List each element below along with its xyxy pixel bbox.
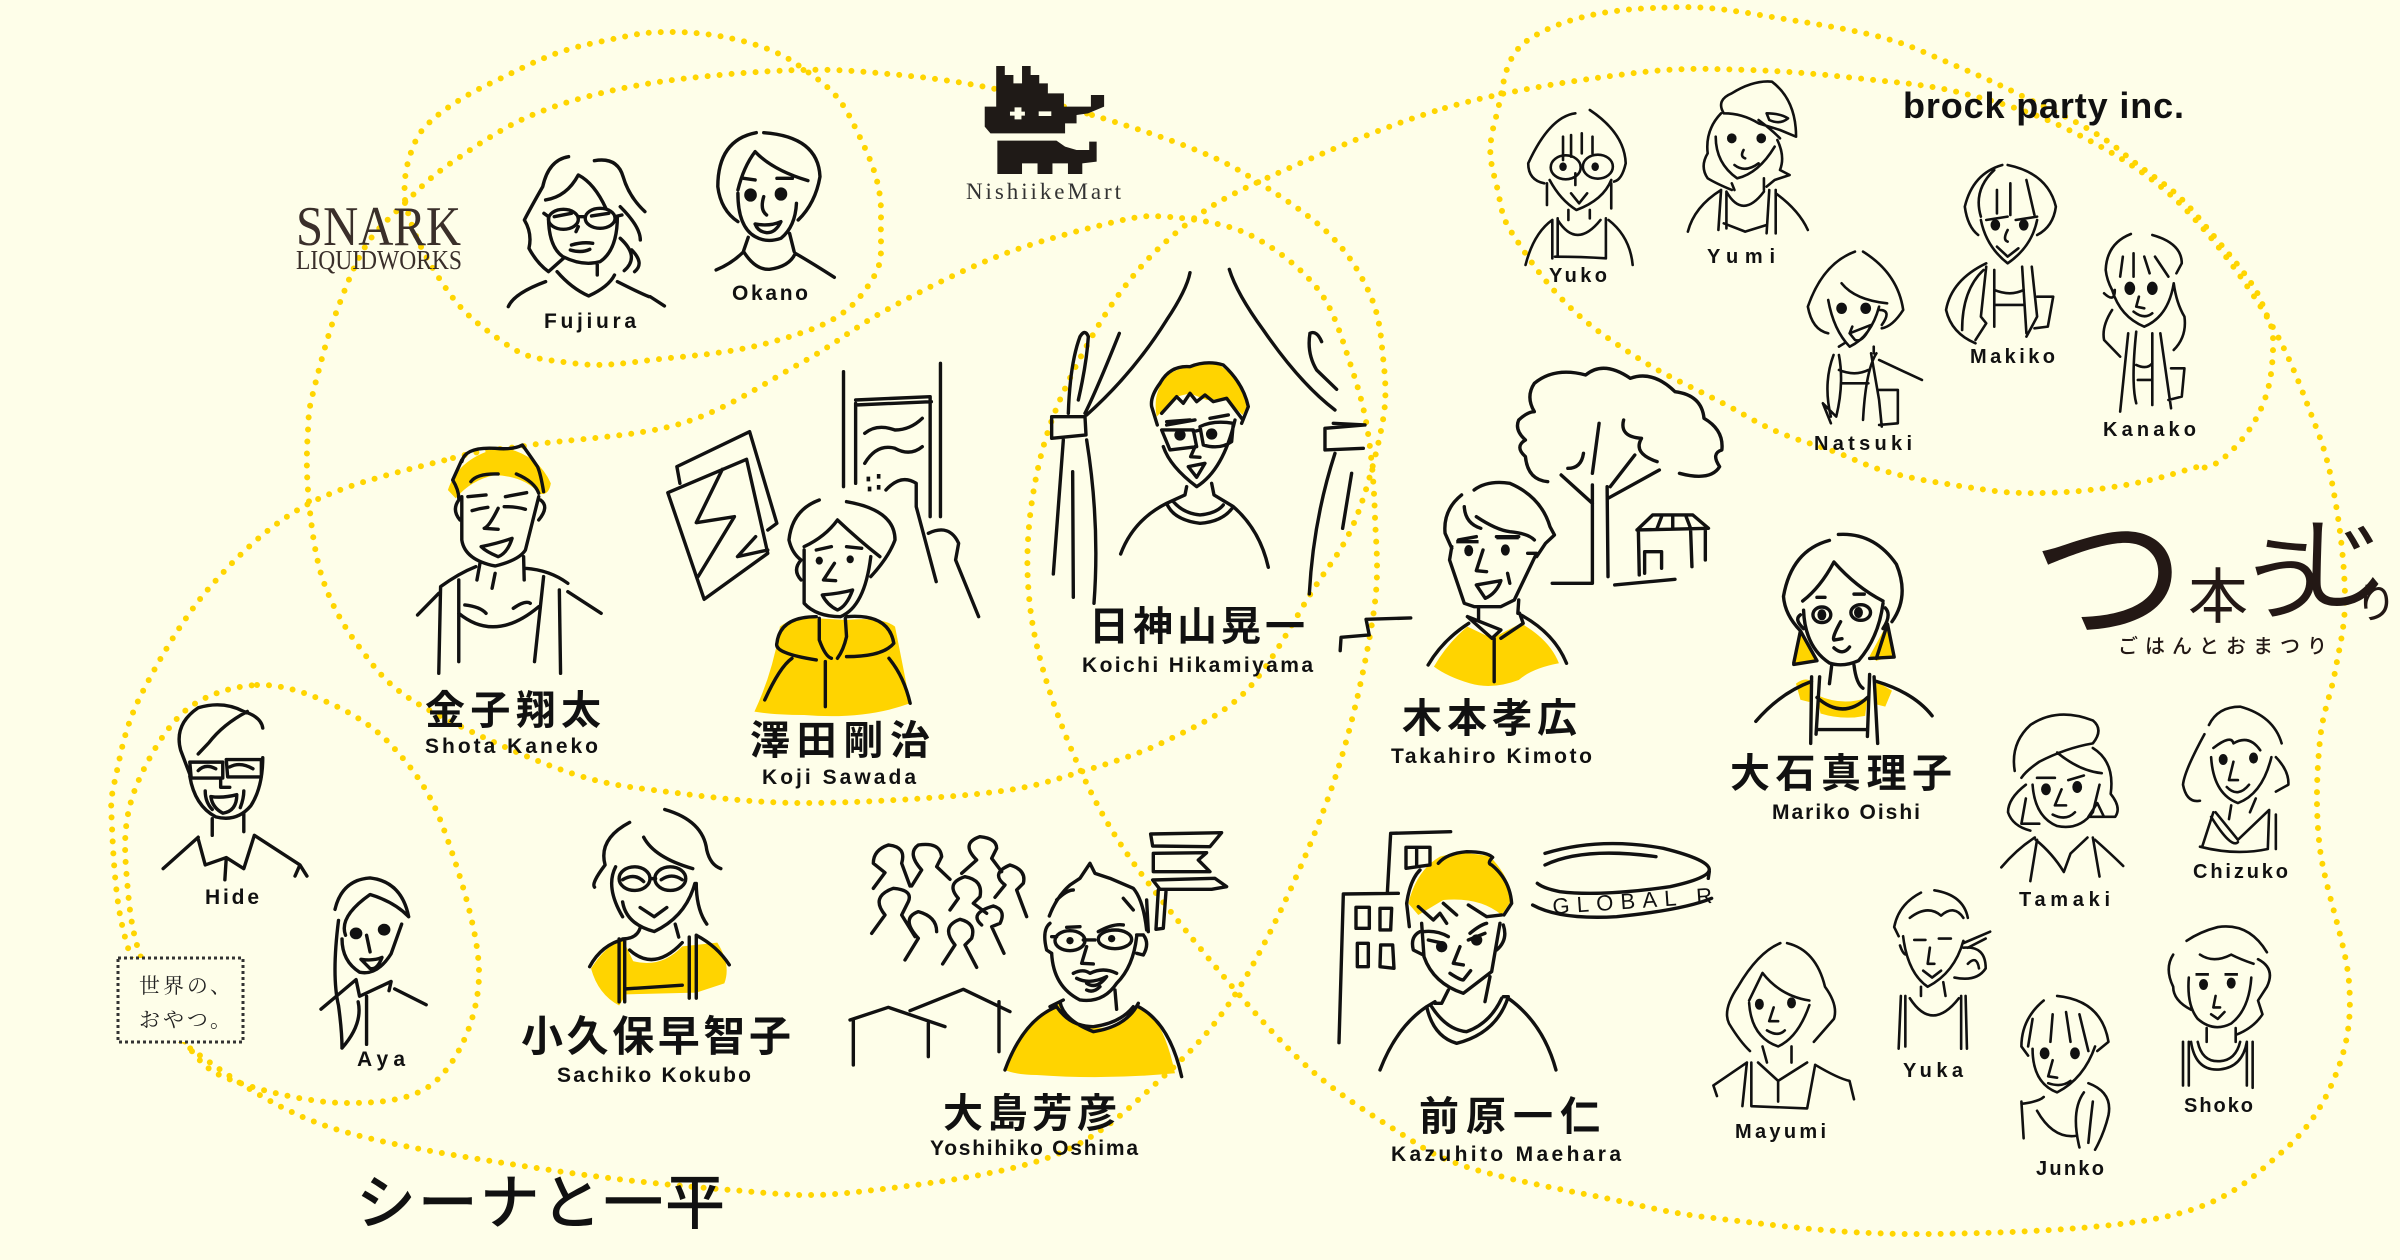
person: Koichi Hikamiyama with curtains <box>1052 269 1365 603</box>
icon: posters <box>668 432 777 599</box>
name roman: Maehara: Kazuhito Maehara <box>1391 1143 1621 1166</box>
name: Junko: Junko <box>2036 1158 2104 1180</box>
figures traced in crop 4 <box>1340 368 1722 686</box>
person: Mayumi <box>1713 943 1854 1108</box>
name kanji: Oishi: 大石真理子 <box>1730 752 1952 796</box>
person: Makiko <box>1946 165 2056 343</box>
name roman: Sawada: Koji Sawada <box>762 766 916 789</box>
name: Natsuki: Natsuki <box>1814 433 1912 455</box>
name roman: Kaneko: Shota Kaneko <box>425 735 598 758</box>
dotted loop: Sekai no Oyatsu <box>125 685 479 1103</box>
name: Mayumi: Mayumi <box>1735 1121 1826 1143</box>
logo: NishiikeMart cat <box>985 66 1104 174</box>
figures traced in crop 6 <box>1526 81 2185 427</box>
person: Kanako <box>2104 234 2185 412</box>
name kanji: Hikamiyama: 日神山晃一 <box>1089 605 1305 649</box>
name kanji: Kimoto: 木本孝広 <box>1402 697 1577 741</box>
name: Yuko: Yuko <box>1549 265 1607 287</box>
name kanji: Oshima: 大島芳彦 <box>943 1092 1117 1136</box>
logo: Tsukiji style brush lettering: つ <box>2031 492 2186 665</box>
person: Shota Kaneko <box>418 445 601 673</box>
icon: stadium <box>1533 844 1712 917</box>
person: Yumi <box>1688 81 1808 233</box>
name: Aya: Aya <box>357 1048 405 1071</box>
icon: signpost <box>1151 833 1227 929</box>
figures traced in crop 3 <box>163 705 729 1048</box>
stadium lettering: GLOBAL R <box>1552 883 1713 919</box>
name: Yumi: Yumi <box>1707 246 1775 268</box>
dotted loop: NishiikeMart <box>307 70 1385 803</box>
person: Mariko Oishi <box>1756 534 1932 743</box>
figures traced in crop 7 <box>1713 534 2288 1150</box>
dotted loop: Snark Liquidworks <box>405 32 881 365</box>
name kanji: Kaneko: 金子翔太 <box>425 689 601 733</box>
person: Tamaki <box>2001 715 2123 881</box>
logo: Tsukiji style brush lettering: り <box>2355 580 2397 627</box>
figures traced in crop 2 <box>418 363 979 716</box>
person: Hide <box>163 705 307 880</box>
name roman: Hikamiyama: Koichi Hikamiyama <box>1082 654 1313 677</box>
icon: houses <box>850 989 1010 1065</box>
person: Shoko <box>2169 926 2270 1088</box>
person: Yuko <box>1526 110 1633 265</box>
stamp: Sekai no Oyatsu <box>118 958 243 1042</box>
name: Kanako: Kanako <box>2103 419 2196 441</box>
person: Takahiro Kimoto <box>1428 482 1567 686</box>
name roman: Kimoto: Takahiro Kimoto <box>1391 745 1592 768</box>
logo subtitle: ごはんとおまつり <box>2118 635 2327 658</box>
person: Okano <box>716 133 834 277</box>
person: Koji Sawada <box>668 432 910 716</box>
name: Yuka: Yuka <box>1903 1060 1964 1082</box>
logo text: LIQUIDWORKS: LIQUIDWORKS <box>296 245 462 275</box>
dotted loop: brock party <box>1490 7 2273 493</box>
icon: steps <box>1340 618 1411 651</box>
name: Okano: Okano <box>732 282 808 305</box>
dotted loop: Shiina and Ippei <box>111 216 1377 1195</box>
icon: buildings <box>1339 832 1451 1043</box>
logo: Tsukiji style brush lettering: じ <box>2290 510 2390 622</box>
person: Kazuhito Maehara with building and stadium <box>1339 832 1712 1070</box>
name kanji: Maehara: 前原一仁 <box>1419 1095 1600 1139</box>
name roman: Oishi: Mariko Oishi <box>1772 801 1920 824</box>
logo: Tsukiji style brush lettering <box>2031 492 2397 665</box>
person: Yoshihiko Oshima with crowd, houses and signpost <box>850 833 1227 1077</box>
name: Chizuko: Chizuko <box>2193 861 2288 883</box>
icon: tree and small house <box>1517 368 1722 585</box>
logo text: NishiikeMart: NishiikeMart <box>966 179 1122 204</box>
logo text: SNARK: SNARK <box>296 196 461 258</box>
title: Shiina and Ippei: シーナと一平 <box>356 1170 725 1237</box>
icon: screen and hands <box>844 363 979 617</box>
name kanji: Sawada: 澤田剛治 <box>750 719 930 763</box>
figures traced in crop 1 <box>508 66 1104 307</box>
name kanji: Kokubo: 小久保早智子 <box>521 1013 791 1060</box>
name roman: Kokubo: Sachiko Kokubo <box>557 1064 751 1087</box>
name: Hide: Hide <box>205 886 259 909</box>
logo: Tsukiji style brush lettering: う <box>2240 530 2332 632</box>
person: Sachiko Kokubo <box>590 809 729 1006</box>
name: Shoko: Shoko <box>2184 1095 2253 1117</box>
name: Makiko: Makiko <box>1970 346 2055 368</box>
logo: Tsukiji style brush lettering: 本 <box>2188 564 2248 631</box>
dotted loop: Tsukiji <box>1027 69 2350 1234</box>
person: Chizuko <box>2183 707 2288 852</box>
stamp: Sekai no Oyatsu: おやつ。 <box>139 1008 231 1032</box>
stamp: Sekai no Oyatsu: 世界の、 <box>139 974 231 998</box>
person: Natsuki <box>1808 252 1922 427</box>
person: Junko <box>2021 996 2109 1150</box>
person: Fujiura <box>508 157 664 307</box>
person: Aya <box>321 878 426 1048</box>
name roman: Oshima: Yoshihiko Oshima <box>930 1137 1138 1160</box>
name: Tamaki: Tamaki <box>2019 889 2110 911</box>
name: Fujiura: Fujiura <box>544 310 636 333</box>
person: Yuka <box>1894 890 1990 1049</box>
icon: crowd <box>872 837 1027 967</box>
brand name: brock party: brock party inc. <box>1903 85 2184 126</box>
